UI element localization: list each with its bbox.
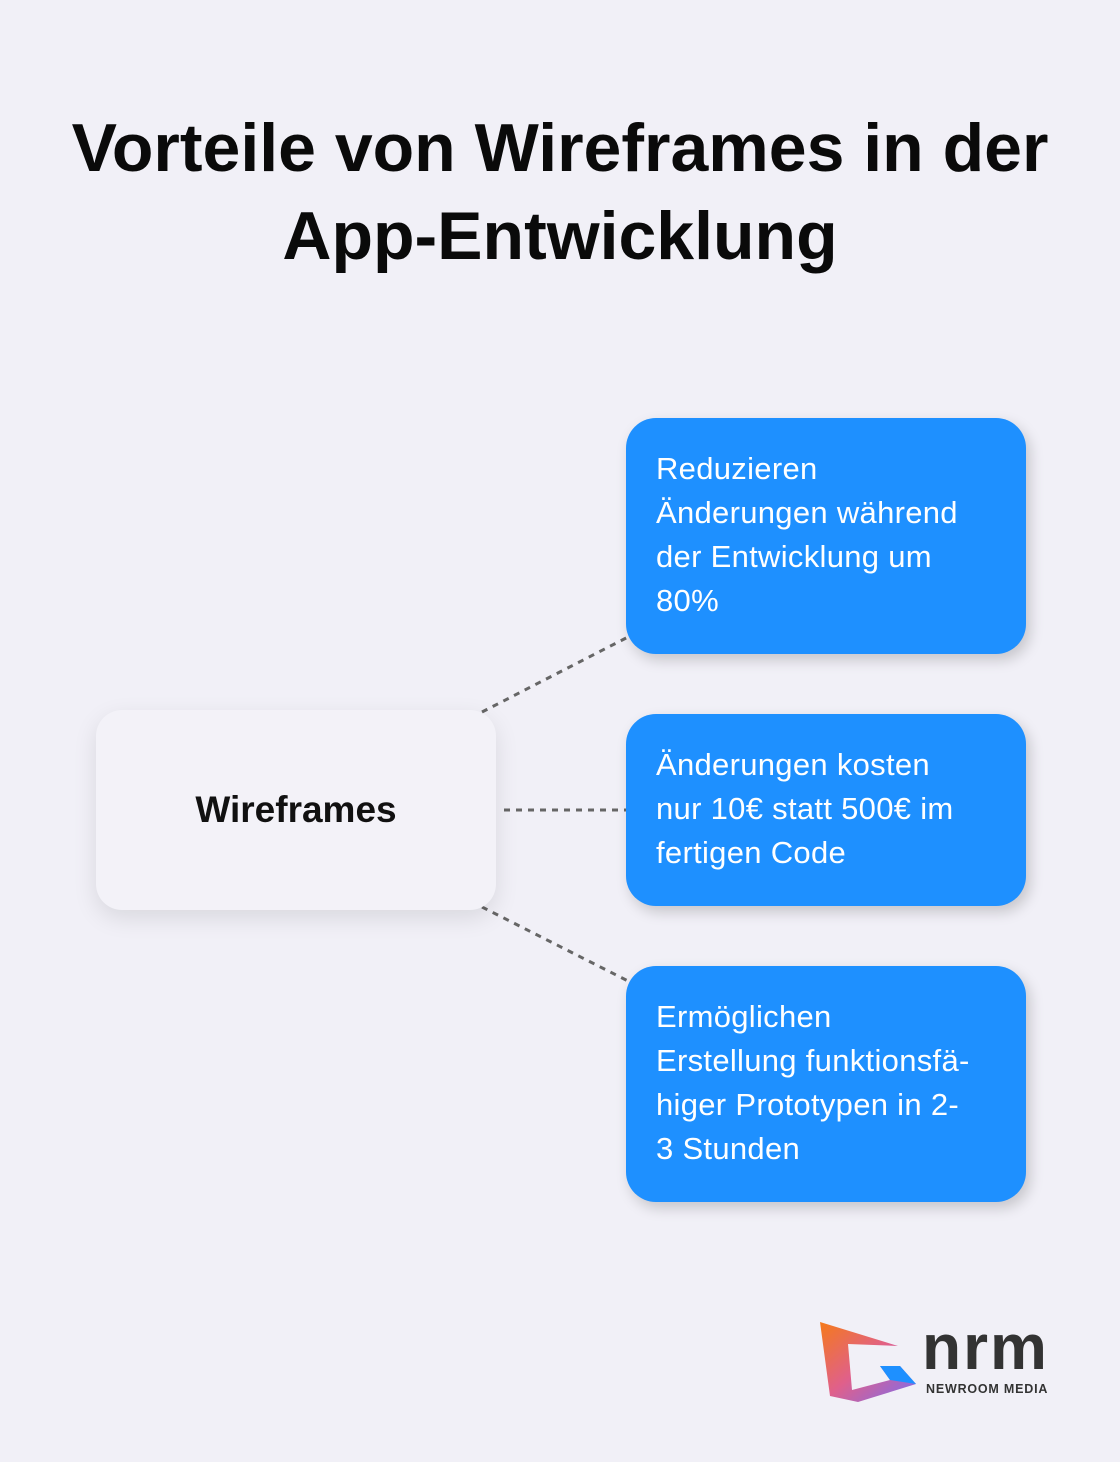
icon: logo mark xyxy=(820,1322,916,1402)
center node: Wireframes: Wireframes xyxy=(195,789,397,830)
logo xyxy=(820,1311,1049,1402)
box: benefit 2: Änderungen kosten xyxy=(656,747,930,782)
logo: NEWROOM MEDIA xyxy=(926,1382,1048,1396)
logo text: nrm xyxy=(922,1311,1049,1383)
box: benefit 1: Reduzieren xyxy=(656,451,818,486)
box: benefit 1: der Entwicklung um xyxy=(656,539,932,574)
box: benefit 1 xyxy=(626,418,1026,654)
box: benefit 3: 3 Stunden xyxy=(656,1131,800,1166)
title: Vorteile von Wireframes in der xyxy=(72,110,1048,186)
box: benefit 1: Änderungen während xyxy=(656,495,958,530)
box: benefit 3 xyxy=(626,966,1026,1202)
box: benefit 3: Ermöglichen xyxy=(656,999,832,1034)
center node: Wireframes xyxy=(96,710,496,910)
title: App-Entwicklung xyxy=(282,198,838,274)
box: benefit 2 xyxy=(626,714,1026,906)
box: benefit 2: fertigen Code xyxy=(656,835,846,870)
title xyxy=(72,110,1048,274)
box: benefit 2: nur 10€ statt 500€ im xyxy=(656,791,954,826)
box: benefit 3: higer Prototypen in 2- xyxy=(656,1087,959,1122)
box: benefit 3: Erstellung funktionsfä- xyxy=(656,1043,970,1078)
box: benefit 1: 80% xyxy=(656,583,719,618)
